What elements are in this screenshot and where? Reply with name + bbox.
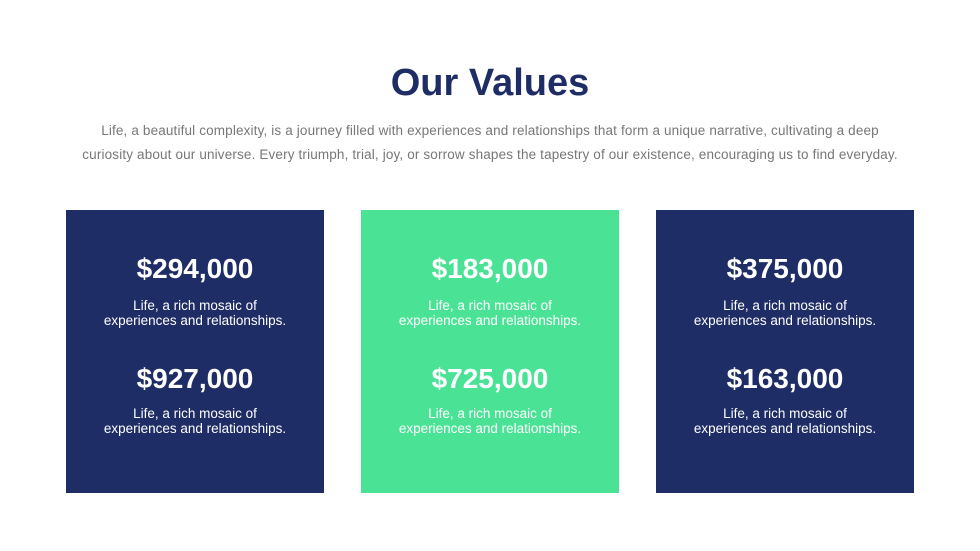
panel: middle [361, 210, 619, 493]
panel: middle: Life, a rich mosaic of [428, 298, 552, 313]
panel: left [66, 210, 324, 493]
panel: left: experiences and relationships. [104, 313, 286, 328]
panel: right: experiences and relationships. [694, 421, 876, 436]
panel: middle: $183,000 [432, 253, 548, 284]
panel: right: $375,000 [727, 253, 843, 284]
panel: right: Life, a rich mosaic of [723, 406, 847, 421]
panel: left: $294,000 [137, 253, 253, 284]
panel: middle: $725,000 [432, 363, 548, 394]
panel: right: Life, a rich mosaic of [723, 298, 847, 313]
panel: middle: experiences and relationships. [399, 421, 581, 436]
panel: right [656, 210, 914, 493]
panel: left: Life, a rich mosaic of [133, 406, 257, 421]
panel: left: experiences and relationships. [104, 421, 286, 436]
intro text: curiosity about our universe. Every triumph, trial, joy, or sorrow shapes the tapestry of our existence, encouraging us to find everyday. [82, 147, 898, 162]
intro text: Life, a beautiful complexity, is a journey filled with experiences and relationships that form a unique narrative, cultivating a deep [101, 123, 879, 138]
panel: left: $927,000 [137, 363, 253, 394]
intro text [82, 123, 898, 162]
panel: right: $163,000 [727, 363, 843, 394]
panel: middle: Life, a rich mosaic of [428, 406, 552, 421]
panel: right: experiences and relationships. [694, 313, 876, 328]
title: Our Values [391, 62, 589, 104]
panel: middle: experiences and relationships. [399, 313, 581, 328]
panel: left: Life, a rich mosaic of [133, 298, 257, 313]
